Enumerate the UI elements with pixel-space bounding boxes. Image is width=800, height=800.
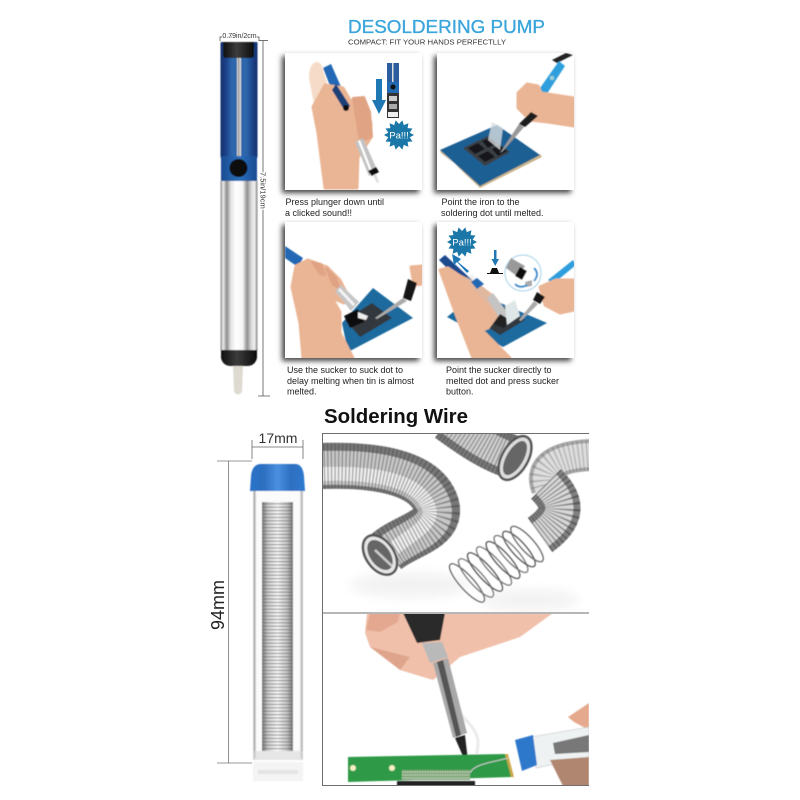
solder tube in hand bbox=[515, 703, 589, 786]
icon: down arrow bbox=[372, 79, 386, 114]
dimension: pump width: 0.79in/2cm bbox=[222, 33, 257, 40]
caption: use the sucker: Use the sucker to suck dot to bbox=[287, 365, 403, 375]
panel: point the sucker bbox=[434, 222, 576, 361]
dimension: tube width: 17mm bbox=[259, 430, 297, 446]
dimension: pump width bbox=[220, 33, 268, 41]
icon: Pa burst: Pa!!! bbox=[389, 130, 409, 142]
solder wire tube bbox=[250, 464, 305, 781]
dimension: tube width bbox=[252, 430, 303, 459]
icon: Pa burst: Pa!!! bbox=[452, 238, 472, 248]
dimension: tube height: 94mm bbox=[208, 580, 228, 630]
caption: point the sucker: melted dot and press sucker bbox=[446, 376, 559, 386]
caption: point the sucker: button. bbox=[446, 386, 474, 396]
caption: press plunger: a clicked sound!! bbox=[285, 208, 352, 218]
hand holding iron bbox=[365, 613, 553, 680]
panel: use the sucker bbox=[282, 222, 422, 361]
coil: top spring bbox=[434, 434, 534, 482]
frames around photos bbox=[322, 434, 589, 786]
title: desoldering pump: DESOLDERING PUMP bbox=[348, 16, 545, 37]
icon: small down arrow bbox=[492, 250, 499, 266]
panel: point the iron bbox=[434, 53, 574, 193]
circuit board bbox=[348, 754, 514, 786]
coil: stretched spring bbox=[445, 455, 592, 606]
caption: point the iron: soldering dot until melted. bbox=[441, 208, 544, 218]
dimension: pump height bbox=[258, 41, 270, 396]
caption: use the sucker: delay melting when tin is almost bbox=[287, 376, 415, 386]
smoke bbox=[462, 714, 480, 756]
desoldering pump product bbox=[220, 42, 258, 394]
dimension: tube height bbox=[208, 461, 252, 763]
icon: up-left arrow bbox=[452, 254, 469, 273]
soldering iron bbox=[402, 614, 468, 756]
caption: point the iron: Point the iron to the bbox=[442, 197, 520, 207]
icon: inset circle bbox=[505, 255, 541, 291]
caption: press plunger: Press plunger down until bbox=[286, 197, 384, 207]
icon: Pa burst bbox=[447, 227, 477, 257]
caption: use the sucker: melted. bbox=[287, 386, 317, 396]
panel: press plunger bbox=[282, 53, 422, 193]
coil: large curved spring bbox=[320, 466, 437, 581]
photo: soldering in use bbox=[348, 613, 589, 786]
icon: mini pump bbox=[387, 63, 399, 118]
heading: soldering wire: Soldering Wire bbox=[324, 406, 468, 428]
subtitle: COMPACT: FIT YOUR HANDS PERFECTLLY bbox=[348, 38, 506, 46]
icon: solder dot bbox=[487, 268, 503, 274]
caption: point the sucker: Point the sucker directly to bbox=[446, 365, 552, 375]
dimension: pump height: 7.5in/19cm bbox=[258, 172, 268, 209]
photo: solder wire coils bbox=[323, 434, 589, 608]
